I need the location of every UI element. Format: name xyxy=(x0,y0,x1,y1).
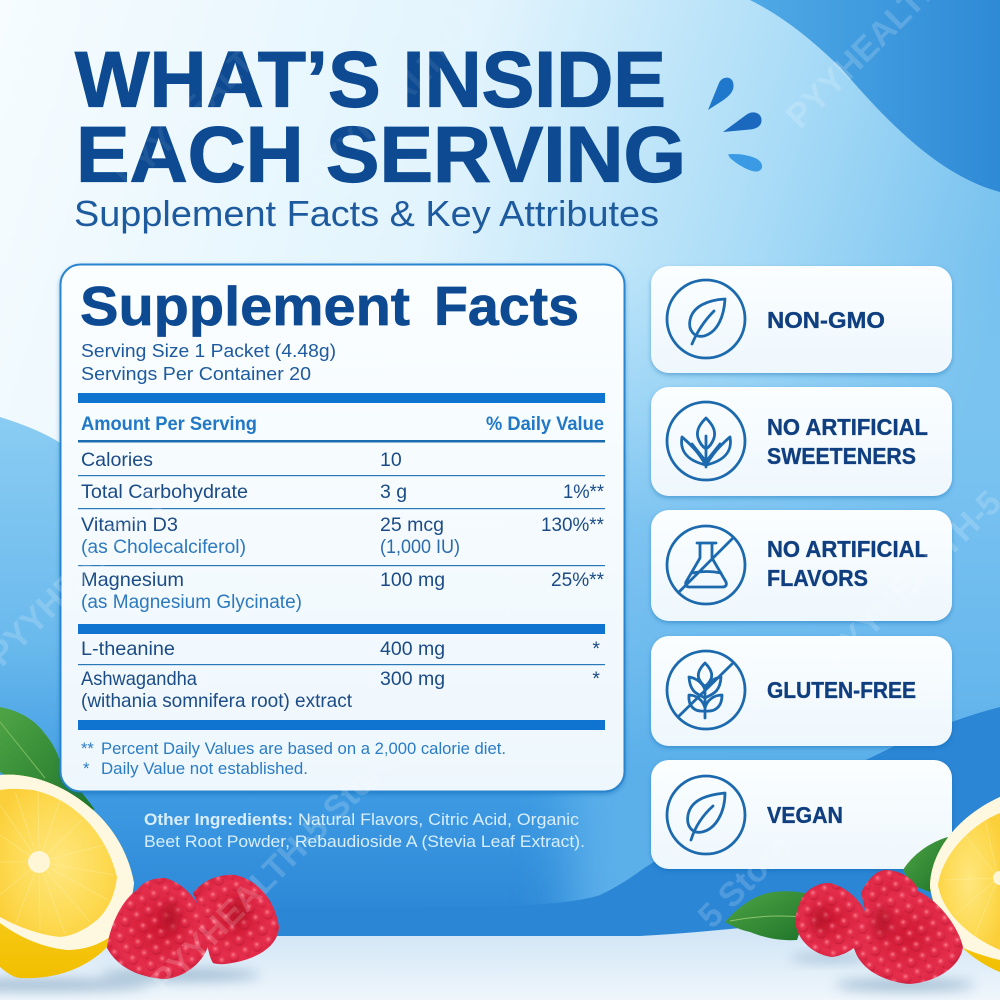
fruit: right leaves xyxy=(725,837,948,940)
fruit: right raspberries xyxy=(790,870,975,991)
card: gluten-free xyxy=(651,636,952,746)
title: WHAT’S INSIDE xyxy=(75,34,666,124)
card: vegan xyxy=(651,760,952,869)
row: l-theanine: 400 mg xyxy=(380,638,445,660)
row: calories xyxy=(81,449,402,471)
fruit: left lemon xyxy=(0,775,150,991)
footnotes xyxy=(81,740,506,778)
row: l-theanine xyxy=(81,638,600,660)
row: vitamin d3: (as Cholecalciferol) xyxy=(81,537,246,558)
serving info: Servings Per Container 20 xyxy=(81,363,311,384)
other ingredients: Natural Flavors, Citric Acid, Organic xyxy=(298,810,580,829)
serving info: Serving Size 1 Packet (4.48g) xyxy=(81,340,336,361)
row: l-theanine: * xyxy=(592,638,600,660)
row: total carbohydrate: 1%** xyxy=(563,481,604,503)
row: ashwagandha: 300 mg xyxy=(380,668,445,690)
icon: crossed wheat xyxy=(667,651,745,729)
title xyxy=(75,34,686,198)
fruit: right lemon xyxy=(930,797,1000,972)
row: total carbohydrate xyxy=(81,481,604,503)
footnotes: Percent Daily Values are based on a 2,000 calorie diet. xyxy=(101,740,506,758)
footnotes: Daily Value not established. xyxy=(101,760,308,778)
label: NO ARTIFICIAL xyxy=(767,536,928,562)
watermarks: PYYHEALTH-5 Store xyxy=(144,740,404,1000)
card: non-gmo xyxy=(651,266,952,373)
label xyxy=(767,414,928,469)
table header: Amount Per Serving xyxy=(81,414,257,435)
other ingredients: Beet Root Powder, Rebaudioside A (Stevia Leaf Extract). xyxy=(144,832,585,851)
row: vitamin d3: Vitamin D3 xyxy=(81,514,178,536)
thick rules xyxy=(78,393,605,730)
panel heading: Facts xyxy=(434,275,579,337)
label: NON-GMO xyxy=(767,307,885,333)
footnotes: * xyxy=(83,760,90,778)
card: no artificial flavors xyxy=(651,510,952,621)
label: FLAVORS xyxy=(767,565,868,591)
title: EACH SERVING xyxy=(76,110,686,198)
other ingredients: Other Ingredients: xyxy=(144,810,293,829)
serving info xyxy=(81,340,336,384)
row: magnesium: 100 mg xyxy=(380,569,445,591)
row: vitamin d3: 25 mcg xyxy=(380,514,444,536)
row: vitamin d3 xyxy=(81,514,604,558)
fruit: left raspberries xyxy=(100,875,279,981)
watermarks: PYYHEALTH xyxy=(109,25,279,196)
row: l-theanine: L-theanine xyxy=(81,638,175,660)
icon: leaf xyxy=(667,776,745,854)
icon: crossed flask xyxy=(667,526,745,604)
row: vitamin d3: (1,000 IU) xyxy=(380,536,460,558)
row: total carbohydrate: Total Carbohydrate xyxy=(81,481,248,503)
watermarks: 5 Store xyxy=(691,827,799,936)
row: magnesium: Magnesium xyxy=(81,569,184,591)
table header: % Daily Value xyxy=(486,414,604,435)
icon: splash drops xyxy=(708,78,762,172)
label: SWEETENERS xyxy=(767,443,916,469)
label: VEGAN xyxy=(767,802,843,828)
row: magnesium: (as Magnesium Glycinate) xyxy=(81,592,302,613)
label: GLUTEN-FREE xyxy=(767,677,916,703)
label xyxy=(767,536,928,591)
watermarks: PYYHEALTH-5 xyxy=(299,4,491,196)
panel heading xyxy=(80,275,579,337)
icon: plant xyxy=(667,402,745,480)
row: ashwagandha xyxy=(81,668,600,712)
subtitle: Supplement Facts & Key Attributes xyxy=(74,193,659,234)
row: vitamin d3: 130%** xyxy=(541,514,604,536)
row: ashwagandha: Ashwagandha xyxy=(81,668,197,690)
panel heading: Supplement xyxy=(80,275,410,337)
row: magnesium: 25%** xyxy=(551,569,604,591)
row: ashwagandha: (withania somnifera root) extract xyxy=(81,690,353,712)
icon: leaf xyxy=(667,280,745,358)
table header xyxy=(81,414,604,435)
row: total carbohydrate: 3 g xyxy=(380,481,407,503)
row: calories: Calories xyxy=(81,449,153,471)
row: ashwagandha: * xyxy=(592,668,600,690)
panel: supplement facts xyxy=(60,264,624,792)
footnotes: ** xyxy=(81,740,94,758)
fruit: left leaf xyxy=(0,707,95,810)
row: magnesium xyxy=(81,569,604,613)
row: calories: 10 xyxy=(380,449,402,471)
other ingredients xyxy=(144,810,585,851)
card: no artificial sweeteners xyxy=(651,387,952,496)
label: NO ARTIFICIAL xyxy=(767,414,928,440)
